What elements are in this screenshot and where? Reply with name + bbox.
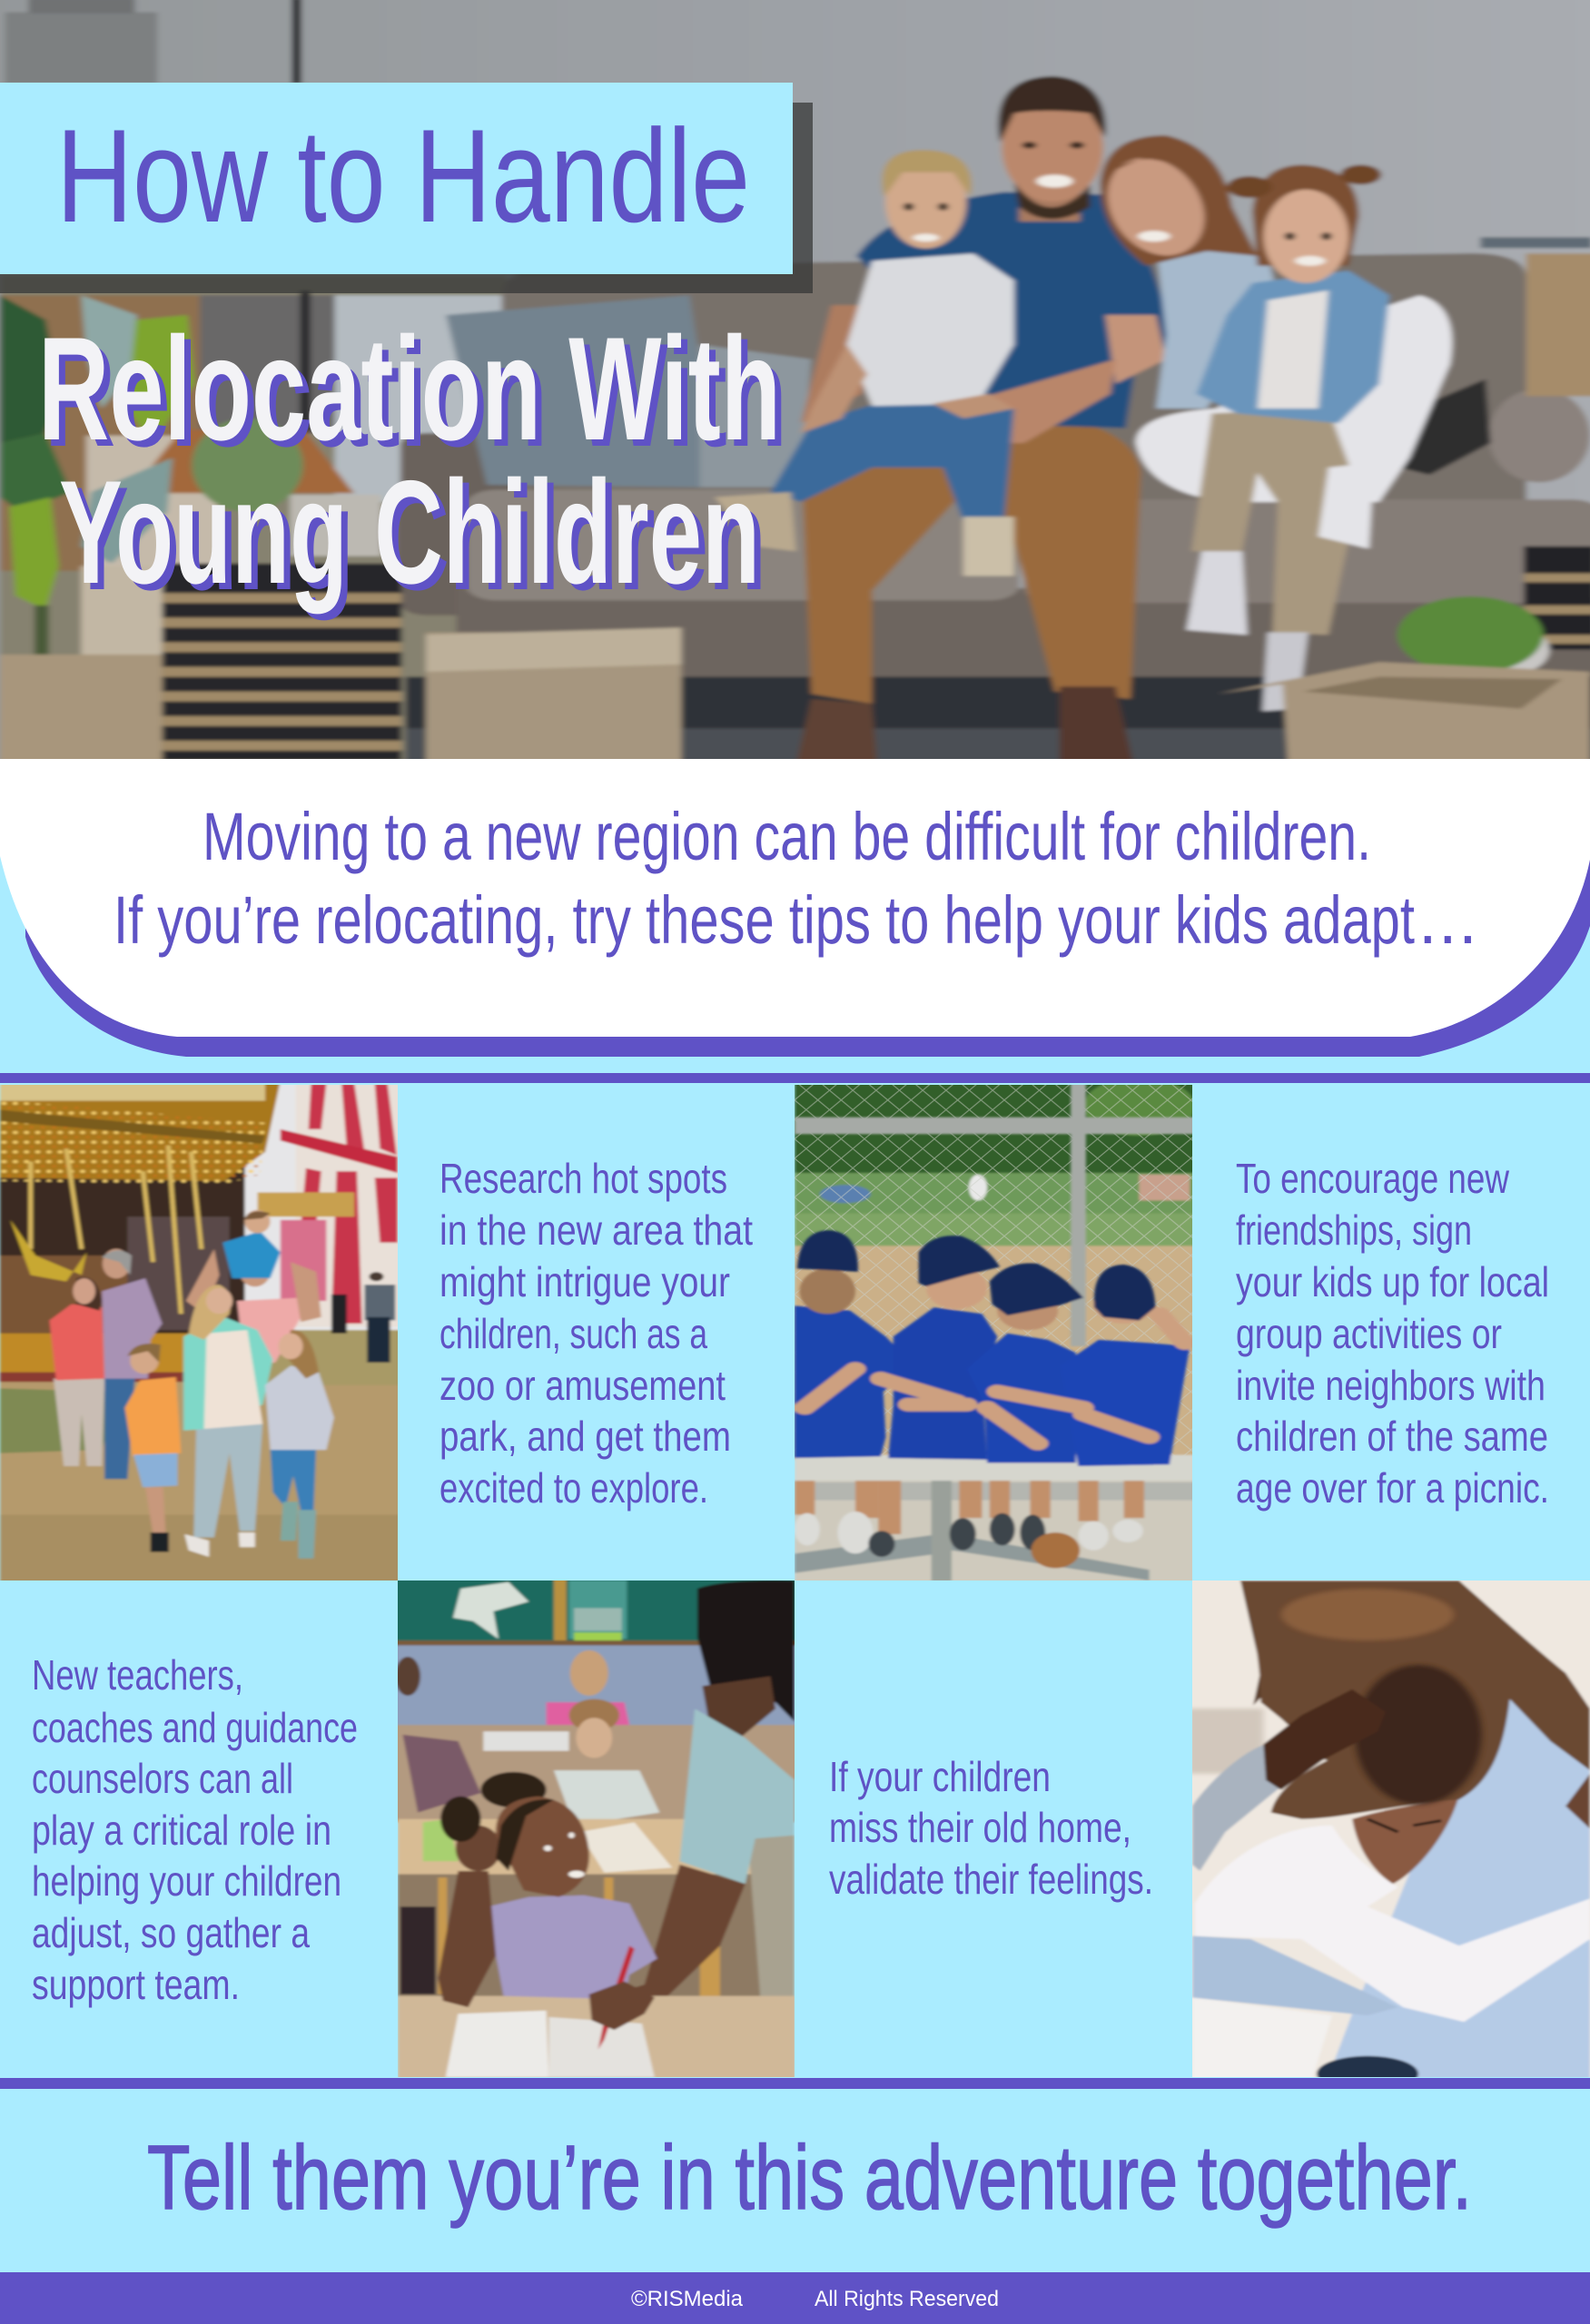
- fair tower: [296, 1080, 408, 1327]
- daughter face: [1352, 1797, 1459, 1884]
- desk front: [398, 1996, 795, 2081]
- right boxes: [1526, 253, 1590, 396]
- tip text: research hot spots: park, and get them: [439, 1413, 731, 1460]
- photo: teacher helping girl in classroom: [398, 1581, 795, 2077]
- daughter hair: [1240, 1581, 1590, 1819]
- mother arms and skirt: [1192, 1997, 1332, 2081]
- daughter white top: [1195, 1826, 1590, 2022]
- title: Relocation With Young Children: Relocation With: [44, 313, 787, 478]
- title box: How to Handle: [0, 83, 793, 274]
- students in background: [570, 1650, 608, 1696]
- mother back: [1327, 1684, 1590, 2081]
- tip text: support team: coaches and guidance: [32, 1704, 358, 1751]
- tip text: encourage new friendships: friendships, sign: [1236, 1206, 1472, 1254]
- title box shadow: [0, 103, 813, 293]
- tip text: research hot spots: children, such as a: [439, 1310, 707, 1357]
- girl: [479, 1896, 657, 1999]
- tip text: support team: play a critical role in: [32, 1807, 331, 1854]
- tip text: encourage new friendships: [1236, 1155, 1549, 1512]
- title: Relocation With Young Children: Young Children: [59, 450, 760, 615]
- photo: family at fairground carousel: [0, 1085, 398, 1581]
- tip text: validate feelings: If your children: [829, 1753, 1051, 1800]
- title: Relocation With Young Children: [38, 307, 787, 621]
- tip text: encourage new friendships: To encourage new: [1236, 1155, 1510, 1202]
- footer bar: ©RISMedia: [631, 2287, 744, 2311]
- title box: How to Handle: How to Handle: [56, 102, 750, 250]
- footer bar: [0, 2272, 1590, 2324]
- room left of sofa: [0, 276, 507, 768]
- top divider bar: [0, 1073, 1590, 1083]
- boy orange: [125, 1377, 181, 1456]
- tip text: support team: adjust, so gather a: [32, 1909, 310, 1956]
- teacher: [746, 1803, 795, 2001]
- tip text: support team: New teachers,: [32, 1651, 243, 1699]
- title: Relocation With Young Children: Relocation With: [38, 307, 781, 471]
- tip text: support team: helping your children: [32, 1857, 341, 1905]
- tip text: support team: counselors can all: [32, 1755, 293, 1802]
- title: Relocation With Young Children: Young Children: [65, 457, 766, 621]
- ground: [0, 1334, 193, 1382]
- tip text: research hot spots: zoo or amusement: [439, 1362, 726, 1409]
- bottom divider bar: [0, 2078, 1590, 2089]
- tip text: support team: support team.: [32, 1961, 240, 2008]
- boy: [771, 399, 1014, 522]
- man with kid on shoulders: [237, 1297, 301, 1365]
- tip text: validate feelings: miss their old home,: [829, 1804, 1131, 1851]
- tip text: research hot spots: excited to explore.: [439, 1464, 708, 1512]
- tip text: research hot spots: in the new area that: [439, 1206, 753, 1254]
- photo: mother hugging daughter: [1192, 1581, 1590, 2077]
- intro banner: curved white panel with purple shadow: [0, 759, 1590, 1057]
- sofa: [502, 253, 1526, 507]
- bench and legs: [795, 1479, 1200, 1582]
- dad: [801, 419, 1141, 704]
- photo: four boys on team bench: [795, 1085, 1192, 1581]
- tip text: research hot spots: Research hot spots: [439, 1155, 727, 1202]
- boys heads and caps: [800, 1268, 855, 1314]
- hero photo: family on sofa with moving boxes: [0, 0, 1590, 759]
- tip text: validate feelings: validate their feelings.: [829, 1856, 1153, 1903]
- footer bar: All Rights Reserved: [815, 2287, 999, 2311]
- grandparents: [54, 1379, 104, 1466]
- mum: [193, 1424, 262, 1538]
- bystanders: [365, 1285, 395, 1320]
- tip text: support team: [32, 1651, 358, 2008]
- boys shirts: [795, 1305, 914, 1458]
- tip text: research hot spots: might intrigue your: [439, 1258, 730, 1305]
- arms: [805, 1314, 1185, 1443]
- pillows: [446, 295, 705, 487]
- girl: [1191, 409, 1358, 635]
- intro text: ...: [1418, 882, 1478, 958]
- mother hand on hair: [1263, 1689, 1386, 1790]
- tip text: validate feelings: [829, 1753, 1153, 1903]
- intro text: [114, 799, 1478, 958]
- tip text: research hot spots: [439, 1155, 753, 1512]
- mom: [1136, 295, 1452, 502]
- open box with plant: [1472, 625, 1549, 675]
- mother face: [1240, 1581, 1281, 1706]
- tip text: encourage new friendships: group activities or: [1236, 1310, 1502, 1357]
- girl: [271, 1448, 316, 1512]
- left boxes: [81, 566, 167, 659]
- plants: [192, 419, 303, 512]
